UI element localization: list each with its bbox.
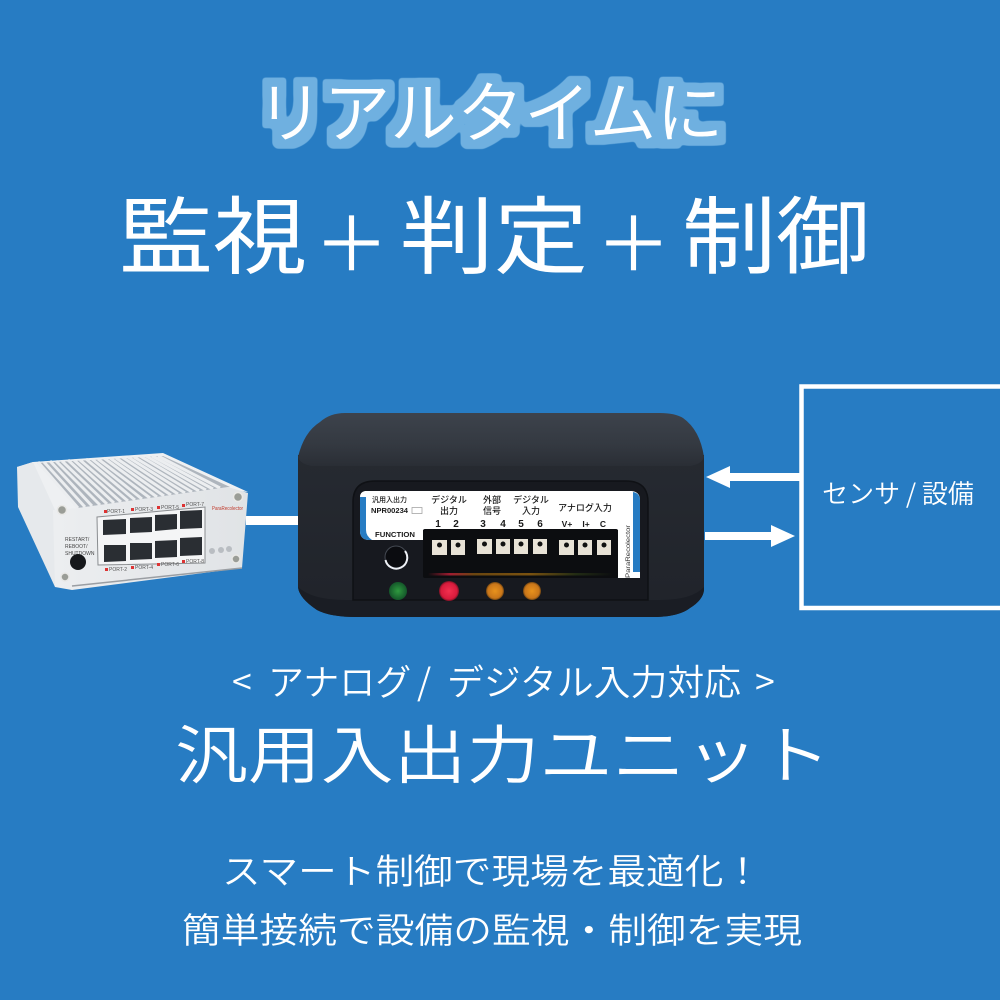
title: monitor + judge + control: 監視 — [119, 169, 307, 292]
subtitle: analog digital input: < — [232, 654, 252, 706]
port labels: PORT-3 — [135, 507, 153, 513]
port labels: PORT-5 — [161, 505, 179, 511]
port labels — [104, 502, 204, 573]
port labels: PORT-7 — [186, 502, 204, 508]
label text: 入力 — [522, 504, 540, 517]
title: monitor + judge + control — [119, 169, 870, 293]
restart label: RESTART/ — [65, 537, 90, 543]
function button — [385, 546, 407, 569]
label text: デジタル — [431, 493, 467, 506]
label text: NPR00234 — [371, 508, 408, 515]
restart label: REBOOT/ — [65, 544, 88, 550]
subtitle: analog digital input: アナログ — [268, 654, 411, 706]
screws — [58, 492, 242, 581]
restart label — [65, 537, 95, 557]
port labels: PORT-1 — [107, 509, 125, 515]
label text: 4 — [500, 519, 506, 530]
sensor / equipment box — [802, 386, 1000, 608]
body line 1: スマート制御で現場を最適化！ — [222, 844, 762, 895]
title: monitor + judge + control: 判定 — [400, 169, 588, 292]
restart button — [70, 554, 86, 570]
front recess — [353, 481, 648, 600]
switch top heat sink — [17, 453, 248, 512]
arrow: sensor to unit — [706, 466, 800, 488]
ethernet ports — [103, 510, 202, 562]
restart label: SHUTDOWN — [65, 551, 95, 557]
label text: V+ — [562, 519, 572, 529]
port labels: PORT-8 — [186, 559, 204, 565]
main unit: input output device — [298, 413, 704, 617]
label text: 出力 — [440, 504, 458, 517]
title: monitor + judge + control: 制御 — [682, 169, 870, 292]
label text: FUNCTION — [375, 532, 415, 539]
status LEDs — [389, 581, 541, 601]
label text: C — [600, 519, 606, 529]
label text: I+ — [582, 519, 590, 529]
label text: 2 — [453, 519, 459, 530]
unit top — [298, 413, 704, 466]
port labels: PORT-2 — [109, 567, 127, 573]
port labels: PORT-6 — [161, 562, 179, 568]
body line 2: 簡単接続で設備の監視・制御を実現 — [182, 903, 802, 954]
subtitle: analog digital input: デジタル入力対応 — [447, 654, 741, 706]
label text: 外部 — [483, 493, 501, 506]
label text: 汎用入出力 — [372, 495, 407, 505]
switch side — [17, 462, 55, 587]
unit body — [298, 455, 704, 617]
terminal block — [423, 529, 618, 578]
title: monitor + judge + control: ＋ — [314, 184, 389, 293]
label text: 1 — [435, 519, 441, 530]
switch front panel — [53, 487, 248, 590]
switch bottom edge — [72, 568, 242, 586]
label text: 5 — [518, 519, 524, 530]
connector: switch to unit — [246, 516, 300, 525]
label blue accents — [360, 497, 372, 540]
sensor label: センサ / 設備 — [822, 474, 974, 511]
port labels: PORT-4 — [135, 565, 153, 571]
status lights — [209, 546, 232, 554]
label text — [371, 493, 612, 539]
white label — [360, 491, 640, 578]
brand label: ParaRecolector — [212, 506, 243, 512]
brand vertical text: ParaRecolector — [625, 524, 632, 578]
unit base band — [298, 587, 704, 617]
title: realtime: リアルタイムに — [256, 60, 724, 157]
subtitle: analog digital input: > — [755, 654, 775, 706]
label text: 3 — [480, 519, 486, 530]
label text: デジタル — [513, 493, 549, 506]
subtitle: analog digital input: / — [417, 654, 431, 706]
subtitle: analog digital input — [232, 654, 775, 706]
network switch device — [17, 453, 248, 590]
label text: 6 — [537, 519, 543, 530]
port block — [97, 507, 205, 565]
title: monitor + judge + control: ＋ — [596, 184, 671, 293]
label text: 信号 — [483, 504, 501, 517]
heading: universal IO unit: 汎用入出力ユニット — [175, 705, 831, 797]
label text: アナログ入力 — [558, 501, 612, 514]
arrow: unit to sensor — [705, 525, 795, 547]
